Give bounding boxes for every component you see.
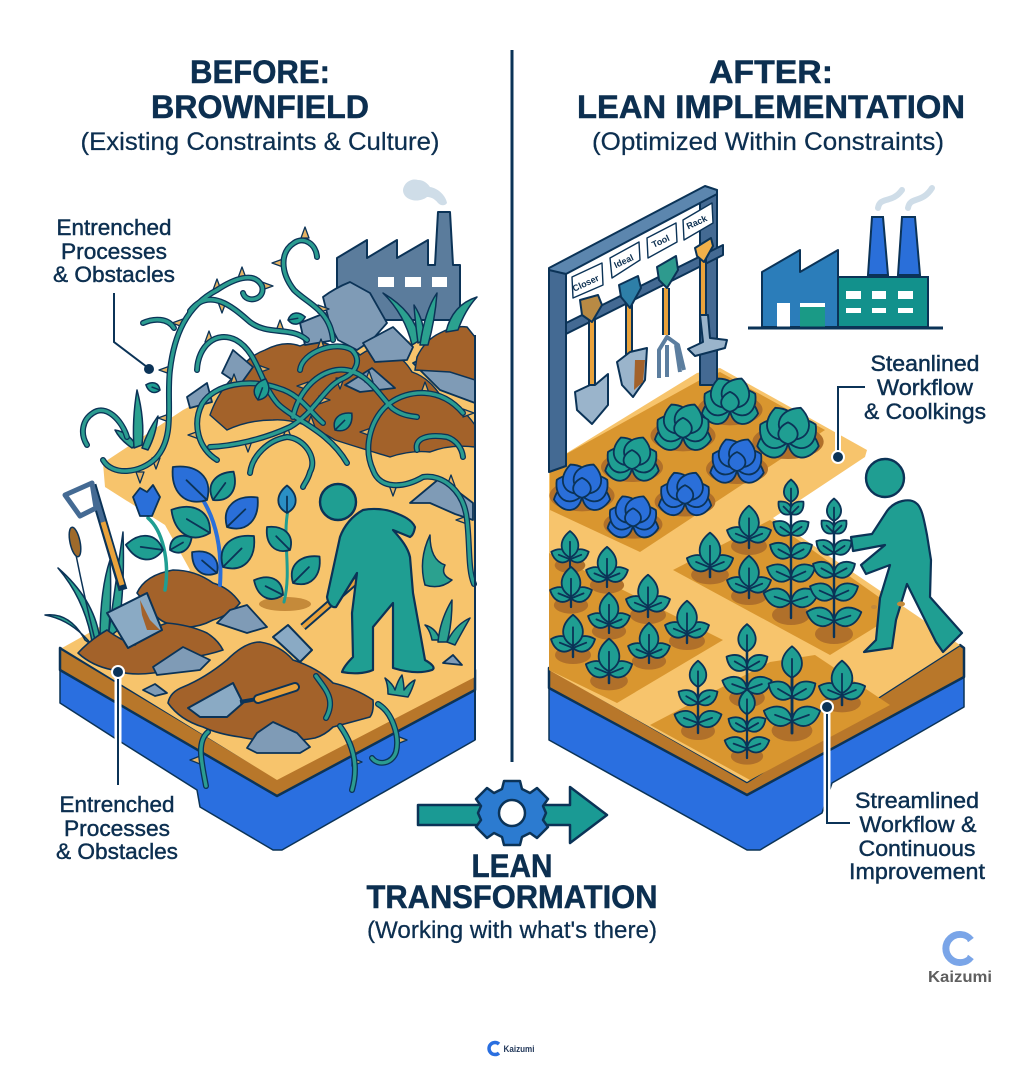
callout: obstacles lower bbox=[56, 665, 178, 864]
seedlings: lower bed bbox=[672, 624, 868, 765]
logo: Kaizumi footer bbox=[489, 1042, 534, 1054]
platform rim: soil edge bbox=[549, 645, 964, 795]
heading: before: BEFORE: bbox=[190, 54, 330, 90]
rocks in the foreground bbox=[143, 605, 462, 753]
seedlings: middle bed bbox=[684, 480, 864, 644]
tool rack: Closer bbox=[571, 273, 601, 294]
tool: trowel bbox=[188, 683, 295, 717]
callout: workflow lower: Streamlined bbox=[855, 788, 979, 813]
plant: small seedling bbox=[249, 486, 328, 611]
callout: obstacles lower: & Obstacles bbox=[56, 839, 178, 864]
crop bed: seedlings middle bbox=[673, 520, 900, 655]
heading: before: (Existing Constraints & Culture) bbox=[80, 128, 440, 156]
rocks behind vines bbox=[187, 282, 475, 520]
callout: workflow lower bbox=[820, 700, 985, 884]
left panel: brownfield isometric plot bbox=[45, 179, 477, 850]
logo: Kaizumi watermark: Kaizumi bbox=[928, 969, 992, 986]
cabbage crop rows bbox=[549, 373, 824, 539]
upper right soil bbox=[415, 327, 475, 380]
callout: obstacles lower: Processes bbox=[64, 816, 170, 841]
plant: big leafy stem bbox=[162, 456, 267, 585]
plot right edge bbox=[474, 335, 476, 740]
callout: workflow upper: Steanlined bbox=[870, 351, 980, 376]
person tending plants bbox=[851, 459, 962, 652]
platform surface: sand bbox=[549, 368, 960, 782]
person digging bbox=[273, 484, 434, 673]
thorny vines bbox=[83, 227, 474, 790]
callout: obstacles upper: Entrenched bbox=[56, 215, 172, 240]
right panel: lean implementation plot bbox=[547, 186, 964, 850]
tool rack: Rack bbox=[685, 213, 709, 231]
center divider bbox=[510, 50, 514, 762]
icon: gear bbox=[476, 781, 548, 845]
back soil mounds bbox=[210, 342, 475, 457]
crop bed: seedlings left bbox=[549, 553, 723, 703]
tool rack: Ideal bbox=[612, 252, 635, 270]
heading: after: LEAN IMPLEMENTATION bbox=[577, 89, 965, 125]
platform base: blue bbox=[549, 660, 964, 850]
platform rim: soil edge bbox=[60, 648, 475, 796]
callout: workflow upper: & Coolkings bbox=[864, 399, 986, 424]
plant: blue flower bbox=[124, 485, 196, 590]
grass clumps bbox=[45, 293, 477, 697]
callout: obstacles lower: Entrenched bbox=[60, 792, 174, 817]
crop bed: cabbages bbox=[550, 372, 825, 552]
callout: workflow lower: Continuous bbox=[858, 836, 976, 861]
tool: shovel in soil bbox=[65, 483, 162, 648]
hanging tools bbox=[575, 238, 727, 424]
callout: workflow lower: Workflow & bbox=[860, 812, 977, 837]
platform base: blue bbox=[60, 660, 475, 850]
garden soil piles bbox=[78, 570, 373, 741]
callout: obstacles upper: Processes bbox=[61, 239, 167, 264]
heading: after: (Optimized Within Constraints) bbox=[592, 128, 944, 156]
callout: workflow upper: Workflow bbox=[877, 375, 973, 400]
callout: workflow upper bbox=[831, 351, 986, 464]
callout: obstacles upper bbox=[53, 215, 175, 374]
clean factory bbox=[748, 188, 943, 328]
logo: Kaizumi footer: Kaizumi bbox=[504, 1044, 534, 1054]
heading: after: AFTER: bbox=[709, 54, 833, 90]
crop bed: seedlings lower bbox=[650, 655, 890, 780]
heading: before bbox=[80, 54, 440, 156]
tool rack bbox=[549, 186, 723, 472]
heading: lean transformation: TRANSFORMATION bbox=[366, 879, 658, 915]
ground specks bbox=[871, 602, 905, 609]
seedlings: left bed bbox=[547, 531, 712, 690]
heading: after bbox=[577, 54, 965, 156]
rack sign labels bbox=[572, 203, 713, 298]
callout: workflow lower: Improvement bbox=[849, 859, 985, 884]
platform surface: sand bbox=[62, 335, 475, 780]
logo: Kaizumi watermark bbox=[928, 934, 992, 986]
heading: lean transformation: (Working with what's there) bbox=[367, 917, 657, 944]
callout: obstacles upper: & Obstacles bbox=[53, 262, 175, 287]
heading: lean transformation bbox=[366, 848, 658, 944]
transformation arrow with gear bbox=[418, 781, 607, 845]
heading: before: BROWNFIELD bbox=[151, 89, 369, 125]
distant factory: grey bbox=[337, 179, 460, 320]
tool rack: Tool bbox=[650, 233, 671, 250]
heading: lean transformation: LEAN bbox=[472, 848, 552, 884]
